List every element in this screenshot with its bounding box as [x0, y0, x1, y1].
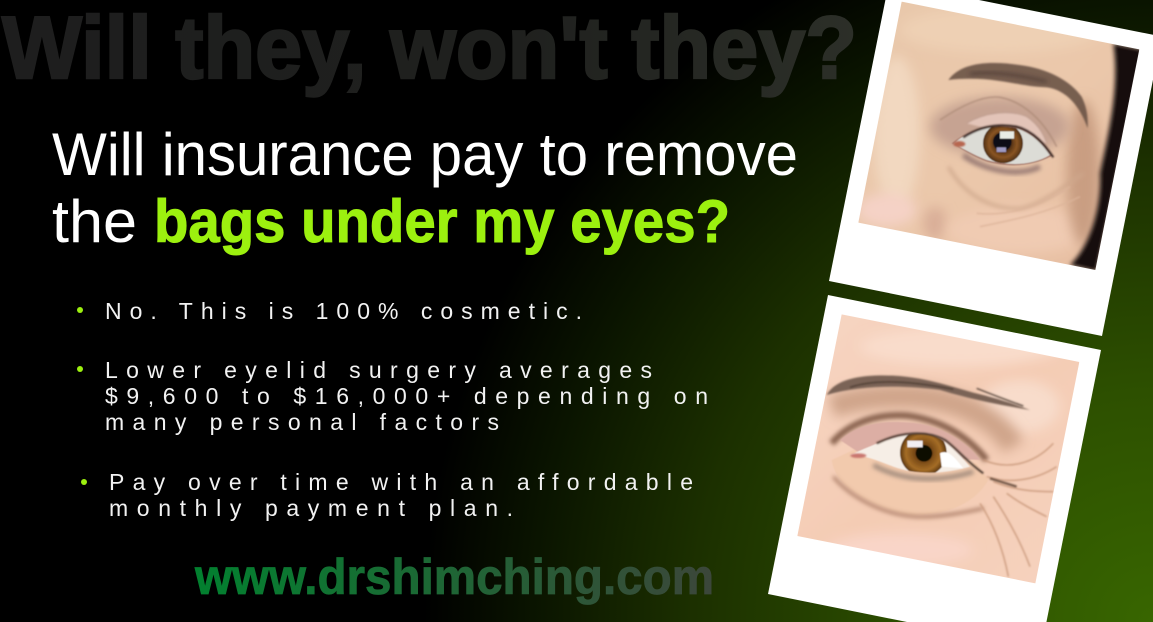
polaroid frame top: [829, 0, 1153, 336]
bullet 3: Pay over time with an affordable: [109, 469, 693, 495]
heading line 2 prefix: the: [52, 188, 137, 255]
bullet 2: $9,600 to $16,000+ depending on: [105, 383, 708, 409]
bullet 2: Lower eyelid surgery averages: [105, 357, 652, 383]
polaroid: top photo: [829, 0, 1153, 336]
bullet 2: [77, 357, 708, 435]
bullet 2: many personal factors: [105, 409, 499, 435]
bullet list: [77, 298, 708, 521]
website url: www.drshimching.com: [194, 549, 714, 605]
ghost heading: Will they, won't they?: [2, 0, 857, 97]
polaroid frame bottom: [768, 295, 1101, 622]
photo: eye with wrinkles and bag, bottom: [793, 310, 1083, 587]
heading line 1: Will insurance pay to remove: [52, 121, 798, 188]
bullet 1: No. This is 100% cosmetic.: [105, 298, 582, 324]
polaroid: bottom photo: [768, 295, 1101, 622]
bullet 3: [81, 469, 693, 521]
bullet 3: monthly payment plan.: [109, 495, 513, 521]
heading highlight: bags under my eyes?: [154, 188, 730, 255]
photo: eye with under-eye bag, top: [853, 0, 1147, 277]
main heading: [52, 121, 798, 255]
